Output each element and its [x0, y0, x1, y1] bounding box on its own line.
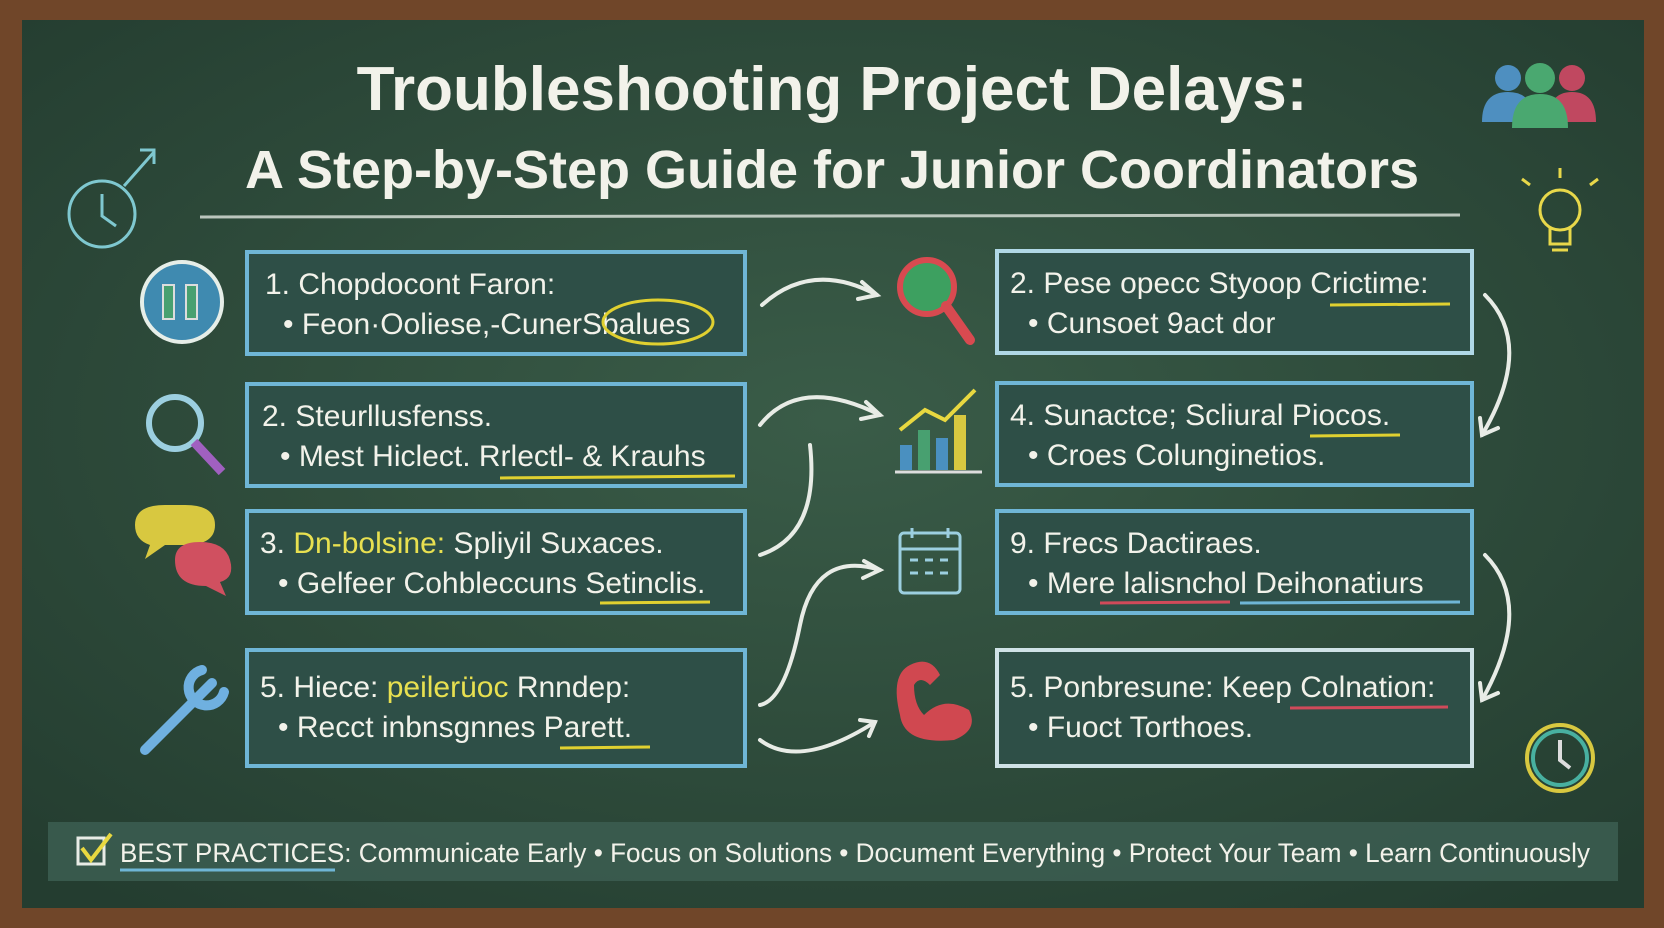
box 4	[247, 650, 745, 766]
icon: clock bottom right	[1527, 725, 1593, 791]
box 4: • Recct inbnsgnnes Parett.	[278, 711, 632, 744]
title: A Step-by-Step Guide for Junior Coordinators	[245, 140, 1419, 200]
box 1: 1. Chopdocont Faron:	[265, 268, 555, 301]
icon: calendar	[900, 528, 960, 593]
arrows	[760, 280, 1509, 752]
arrow: 1 to r1	[762, 280, 877, 305]
box 2	[247, 384, 745, 486]
box r2: 4. Sunactce; Scliural Piocos.	[1010, 399, 1390, 432]
arrow: 2 to middle	[760, 397, 880, 425]
icon: bar chart	[895, 390, 982, 472]
arrow: 3 up	[760, 445, 811, 555]
box 4: 5. Hiece: peilerüoc Rnndep:	[260, 671, 630, 704]
box r2: • Croes Colunginetios.	[1028, 439, 1325, 472]
box 3: 3. Dn-bolsine: Spliyil Suxaces.	[260, 527, 664, 560]
icon: pause	[142, 262, 222, 342]
icon: checkbox	[78, 834, 111, 864]
icon: flexed arm	[897, 662, 972, 741]
box r4	[997, 650, 1472, 766]
best practices banner: BEST PRACTICES: Communicate Early • Focus on Solutions • Document Everything • Protect Your Team • Learn Continuously	[120, 838, 1590, 868]
arrow: r3 to r4	[1480, 555, 1509, 700]
box r1: 2. Pese opecc Styoop Crictime:	[1010, 267, 1429, 300]
icon: red magnifier	[900, 260, 970, 340]
title	[200, 55, 1460, 217]
box 2: • Mest Hiclect. Rrlectl- & Krauhs	[280, 440, 706, 473]
icon: wrench	[145, 670, 224, 750]
box 3: • Gelfeer Cohbleccuns Setinclis.	[278, 567, 705, 600]
middle icons	[895, 260, 982, 741]
box 3	[247, 511, 745, 613]
box r2	[997, 383, 1472, 485]
box r1	[997, 251, 1472, 353]
box r3	[997, 511, 1472, 613]
right step boxes	[997, 251, 1472, 766]
arrow: r1 to r2	[1480, 295, 1509, 435]
box 1	[247, 252, 745, 354]
box 1: • Feon·Ooliese,-CunerSbalues	[283, 308, 690, 341]
icon: magnifier	[149, 397, 222, 472]
box 2: 2. Steurllusfenss.	[262, 400, 492, 433]
box r3: 9. Frecs Dactiraes.	[1010, 527, 1262, 560]
icon: lightbulb	[1522, 168, 1598, 250]
arrow: 4 to calendar	[760, 561, 880, 705]
icon: speech bubbles	[135, 505, 231, 596]
icon: team people	[1482, 63, 1596, 128]
box r4: 5. Ponbresune: Keep Colnation:	[1010, 671, 1435, 704]
left step boxes	[247, 252, 745, 766]
arrow: 4 to arm	[760, 720, 875, 752]
title: Troubleshooting Project Delays:	[357, 55, 1307, 124]
box r3: • Mere lalisnchol Deihonatiurs	[1028, 567, 1424, 600]
box r4: • Fuoct Torthoes.	[1028, 711, 1253, 744]
icon: clock with arrow	[69, 150, 154, 247]
left icons	[135, 262, 231, 750]
best practices banner	[48, 822, 1618, 881]
box r1: • Cunsoet 9act dor	[1028, 307, 1275, 340]
